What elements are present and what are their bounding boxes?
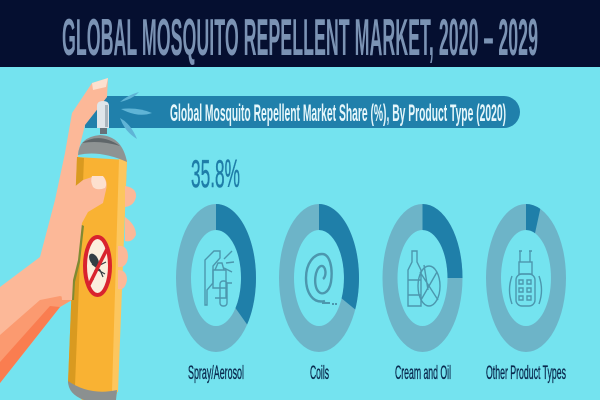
donut: Spray/Aerosol xyxy=(176,204,256,384)
icon: cream bottle and crossed mosquito xyxy=(408,251,440,306)
thumb and fingers xyxy=(58,176,136,300)
donut: Other Product Types xyxy=(486,204,566,384)
spray nozzle xyxy=(97,101,109,134)
illustration: hand holding spray can xyxy=(0,78,136,400)
donut: Coils: Coils xyxy=(310,363,329,384)
icon: plug-in repellent device xyxy=(510,251,542,306)
hand and arm xyxy=(0,78,108,383)
subtitle banner xyxy=(85,92,520,139)
header band xyxy=(0,0,600,67)
icon: spray bottle xyxy=(205,251,234,306)
donut: Coils xyxy=(279,204,359,384)
donut: Cream and Oil: Cream and Oil xyxy=(395,363,451,384)
donut: Spray/Aerosol: Spray/Aerosol xyxy=(188,363,244,384)
spray can xyxy=(68,135,127,400)
infographic canvas: 35.8% xyxy=(191,153,240,196)
spray droplets xyxy=(120,92,152,139)
no-mosquito badge xyxy=(85,237,110,295)
mosquito xyxy=(87,252,106,280)
icon: mosquito coil xyxy=(306,254,337,304)
donut: Cream and Oil xyxy=(382,204,462,384)
